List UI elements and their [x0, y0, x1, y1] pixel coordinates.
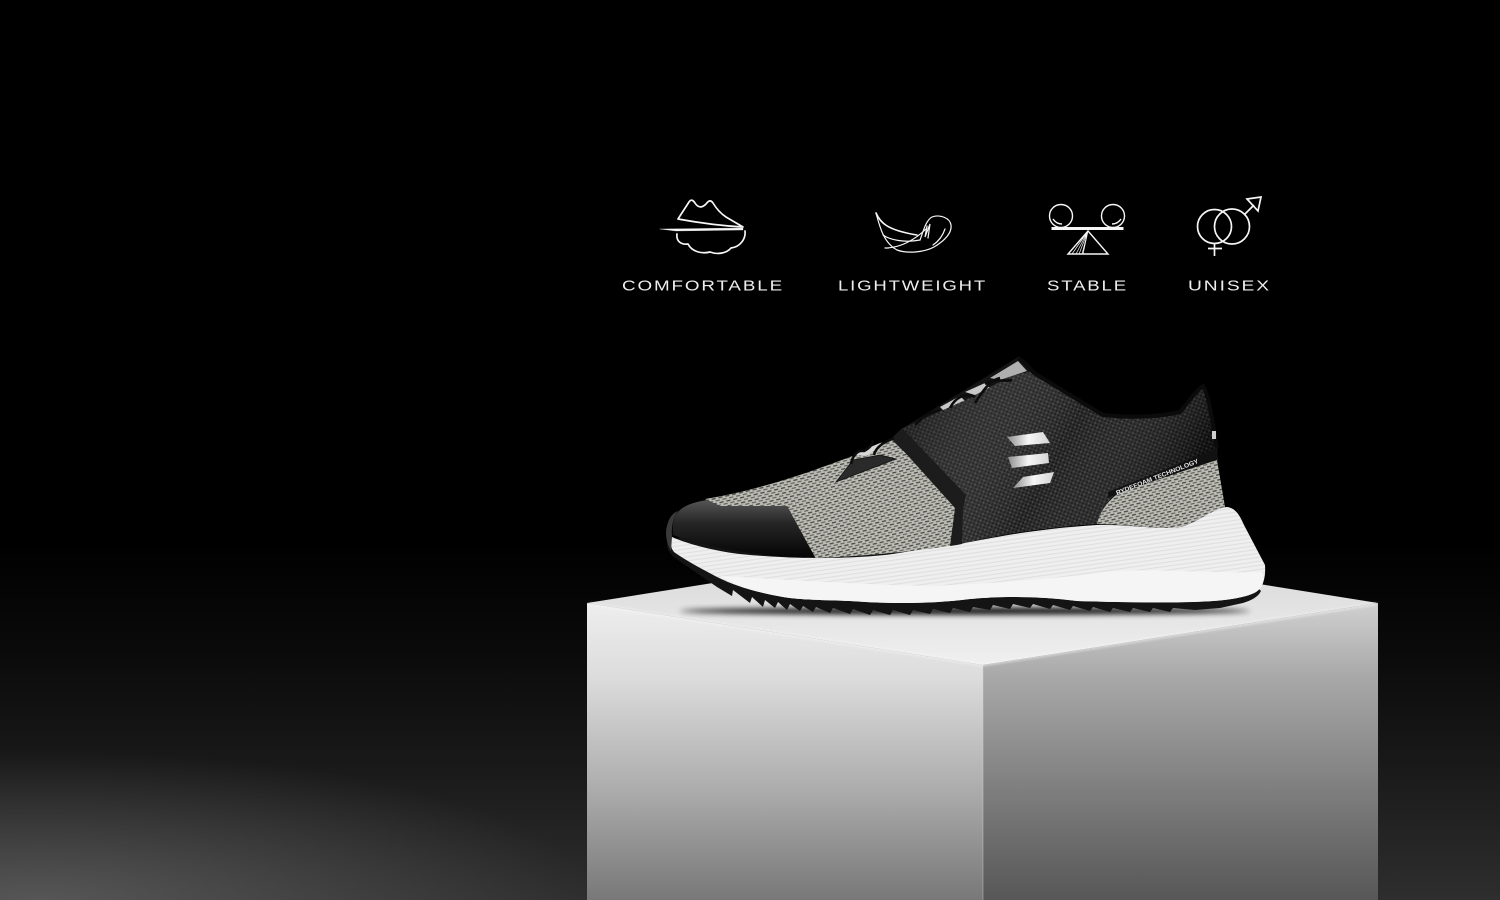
midsole lower band	[720, 570, 1264, 603]
feature: unisex	[1188, 197, 1271, 294]
outsole with teeth	[667, 530, 1261, 615]
white midsole	[671, 507, 1265, 603]
heel band	[1108, 449, 1218, 498]
toe cap	[673, 500, 815, 557]
feature: comfortable	[622, 200, 784, 294]
icon: feather	[876, 213, 951, 252]
pedestal top face	[587, 540, 1378, 665]
shoe shadow on pedestal	[680, 608, 1250, 614]
tongue and eyestay	[854, 357, 1033, 456]
heel tab	[1212, 431, 1216, 439]
lace panel	[836, 455, 896, 482]
black mesh upper	[892, 372, 1218, 545]
icon: gender symbols	[1198, 197, 1261, 256]
shoe	[666, 357, 1265, 615]
icon: balance	[1050, 204, 1124, 254]
black strap	[892, 428, 966, 546]
label: unisex: UNISEX	[1188, 278, 1271, 294]
toe edge	[666, 511, 678, 551]
pedestal right face	[983, 603, 1378, 900]
feature: lightweight	[838, 213, 987, 294]
icon: shoe on cloud	[660, 200, 745, 253]
pedestal	[587, 540, 1378, 900]
pedestal left face	[587, 603, 983, 900]
band text: RYDEFOAM TECHNOLOGY	[1115, 458, 1200, 497]
collar edge	[1018, 358, 1217, 448]
label: lightweight: LIGHTWEIGHT	[838, 278, 987, 294]
laces	[851, 378, 1012, 464]
gray knit heel panel	[1097, 460, 1225, 528]
feature: stable	[1047, 204, 1128, 294]
gray knit forefoot upper	[705, 440, 960, 558]
label: comfortable: COMFORTABLE	[622, 278, 784, 294]
logo stripes	[1007, 432, 1054, 488]
label: stable: STABLE	[1047, 278, 1128, 294]
